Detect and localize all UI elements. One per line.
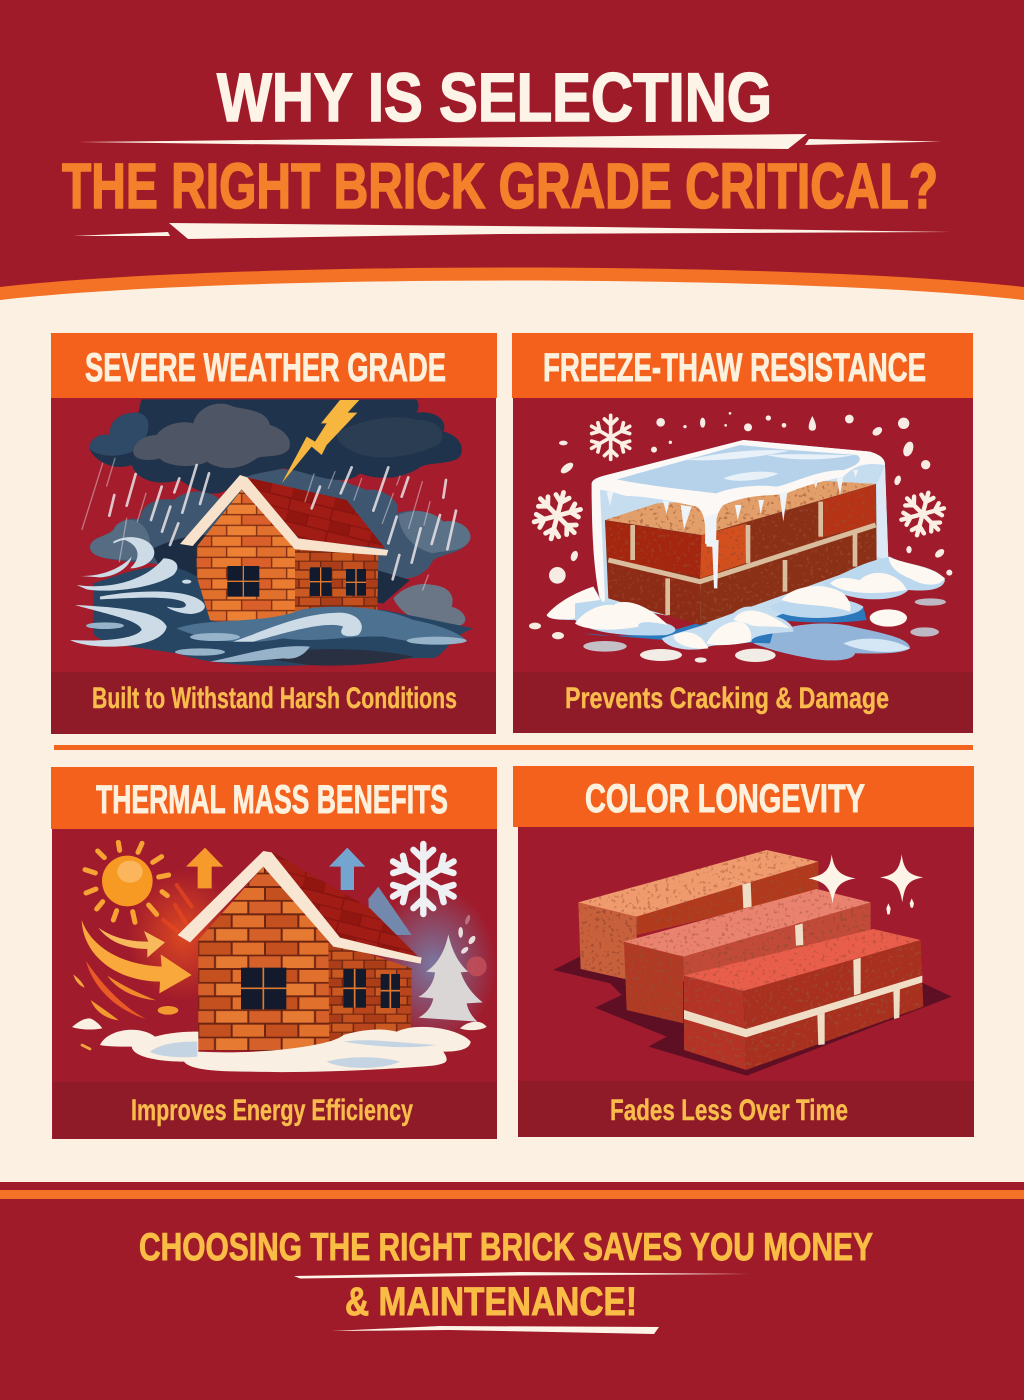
footer line two: & MAINTENANCE!	[345, 1280, 637, 1324]
arrow: cold up	[329, 848, 365, 890]
house	[178, 851, 422, 1052]
heading: severe weather grade: SEVERE WEATHER GRADE	[85, 346, 446, 390]
lightning bolt	[282, 400, 359, 483]
grey cloud	[133, 404, 290, 468]
footer rule one	[294, 1272, 749, 1278]
mid clouds	[90, 469, 471, 603]
heading: color longevity: COLOR LONGEVITY	[585, 777, 865, 821]
snowflake: top left	[588, 415, 633, 459]
rain	[82, 458, 456, 590]
caption: improves energy efficiency: Improves Energy Efficiency	[131, 1094, 413, 1127]
dark storm cloud	[89, 399, 462, 494]
panel: thermal mass benefits	[51, 767, 497, 1139]
ground shadow	[553, 956, 952, 1076]
icon: pine tree	[418, 934, 483, 1022]
caption: built to withstand: Built to Withstand Harsh Conditions	[92, 682, 457, 715]
title line one: WHY IS SELECTING	[217, 59, 772, 136]
caption: prevents cracking: Prevents Cracking & Damage	[565, 682, 889, 715]
heading: thermal mass benefits: THERMAL MASS BENEFITS	[96, 778, 448, 822]
caption: fades less over time: Fades Less Over Time	[610, 1094, 848, 1127]
waves	[70, 537, 473, 666]
right lower cloud	[393, 584, 465, 626]
illustration: three bricks	[553, 850, 952, 1076]
panel: freeze-thaw resistance	[512, 333, 973, 733]
title upper rule	[78, 134, 941, 149]
snowflake: mid right	[896, 487, 950, 541]
header band	[0, 0, 1024, 300]
falling flakes	[549, 412, 952, 584]
heat and cold glow	[127, 868, 497, 1045]
illustration: storm house	[70, 399, 473, 666]
snow piles	[547, 557, 945, 650]
panel: severe weather grade	[51, 333, 497, 734]
ice top	[592, 440, 888, 603]
sparkles	[808, 854, 923, 914]
snowflakes	[528, 415, 950, 545]
meltwater puddle	[583, 603, 910, 660]
house	[180, 475, 388, 625]
footer rule two	[332, 1326, 659, 1334]
brick: front	[684, 929, 923, 1070]
melting drops	[458, 914, 487, 976]
panel: color longevity	[513, 766, 974, 1137]
snow ground	[72, 1018, 487, 1072]
brick: middle	[624, 889, 871, 1023]
brick	[605, 480, 877, 625]
snowflake: mid left	[528, 486, 587, 545]
title lower rule	[73, 223, 951, 239]
footer band	[0, 1182, 1024, 1400]
ice casing	[592, 440, 888, 630]
title	[62, 59, 951, 239]
ice chips	[529, 598, 946, 663]
brick: back	[578, 850, 818, 982]
arrow: heat up	[186, 848, 223, 888]
heat arrows	[73, 885, 192, 1049]
divider	[54, 745, 973, 750]
footer message	[139, 1226, 873, 1334]
illustration: frozen brick	[528, 412, 952, 663]
icon: sun	[85, 842, 169, 922]
illustration: thermal house	[72, 842, 497, 1072]
icon: snowflake	[388, 844, 459, 914]
